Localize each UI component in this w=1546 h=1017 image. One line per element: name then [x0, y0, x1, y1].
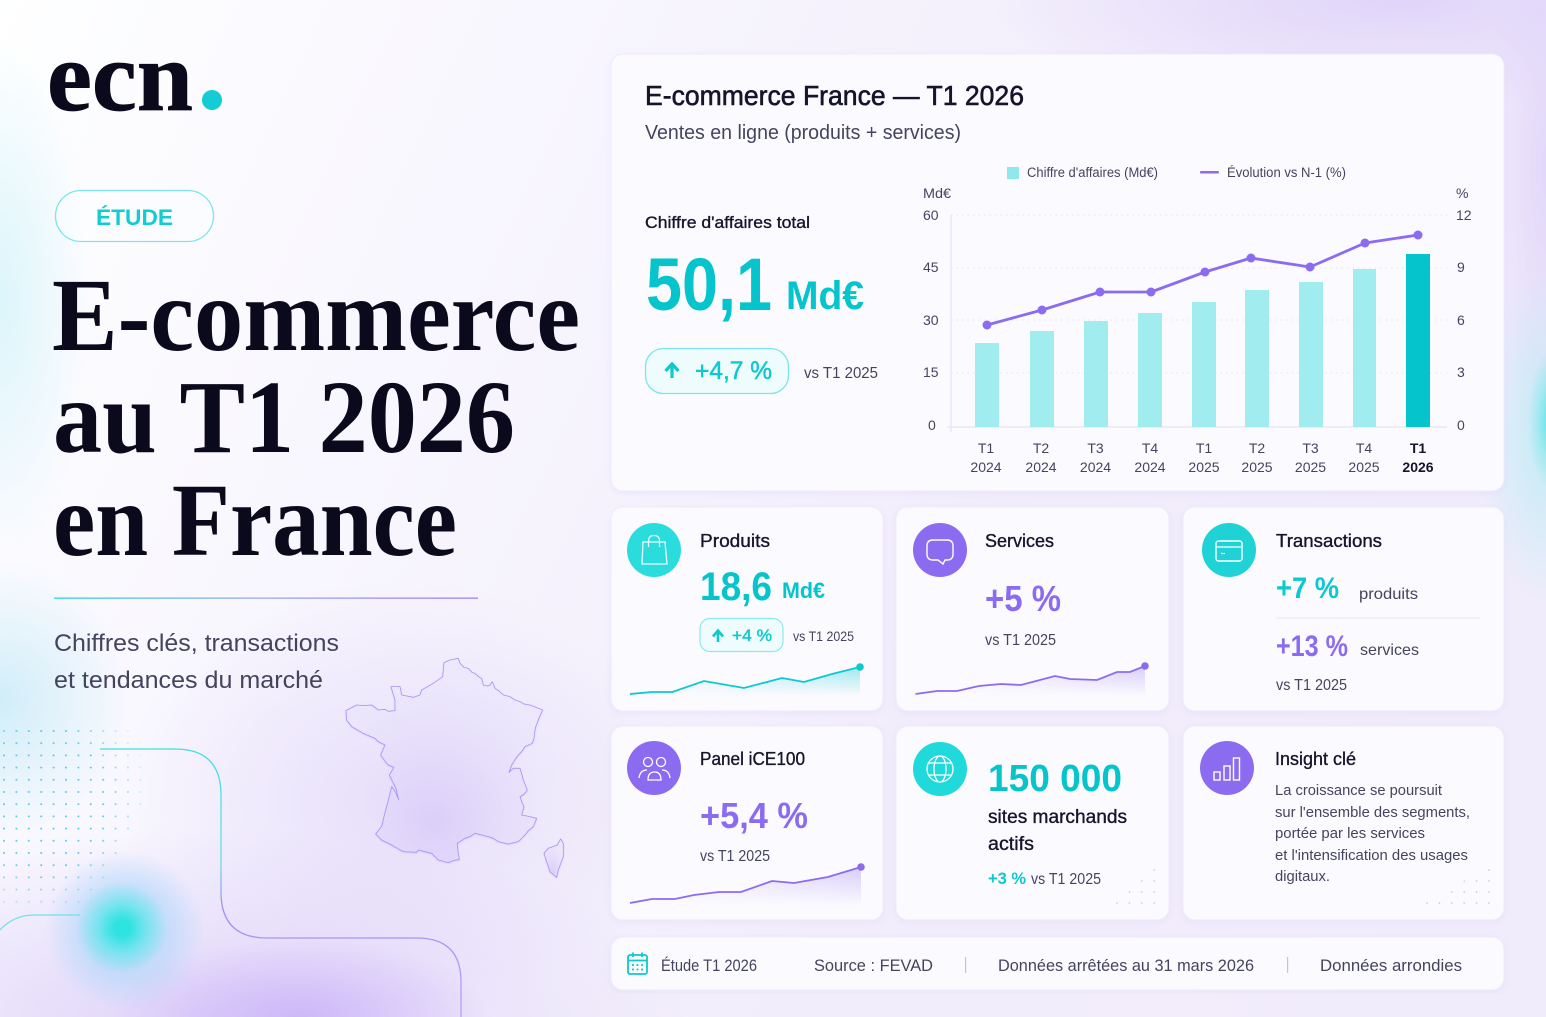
chart: revenue bars and growth line: 0 [928, 417, 936, 433]
total label: Chiffre d'affaires total [645, 213, 810, 232]
footer text [661, 956, 1462, 975]
chart: revenue bars and growth line: T3 [1087, 440, 1104, 456]
chart: revenue bars and growth line: 2026 [1402, 459, 1434, 475]
chart: revenue bars and growth line: T3 [1302, 440, 1319, 456]
insight text: La croissance se poursuit [1275, 782, 1443, 799]
title divider [54, 598, 478, 599]
footer text: Données arrêtées au 31 mars 2026 [998, 957, 1254, 975]
title: au T1 2026 [53, 360, 515, 475]
row divider [1276, 618, 1480, 619]
chart: revenue bars and growth line: 2025 [1348, 459, 1380, 475]
chart legend [1007, 165, 1346, 180]
badge: étude [56, 190, 214, 242]
chart: revenue bars and growth line: % [1456, 185, 1468, 201]
decorative curved line [0, 749, 461, 1017]
insight text: portée par les services [1275, 825, 1425, 842]
icon: globe [913, 742, 967, 796]
chart: revenue bars and growth line: 0 [1457, 417, 1465, 433]
card heading: Insight clé [1275, 749, 1356, 769]
value: produits: +7 % [1276, 572, 1339, 605]
card: produits [611, 507, 883, 711]
comparison label: vs T1 2025 [793, 628, 854, 644]
sparkline [630, 863, 865, 905]
chart: revenue bars and growth line: T2 [1249, 440, 1265, 456]
subtitle: et tendances du marché [54, 667, 323, 694]
chart: revenue bars and growth line: 2024 [1025, 459, 1057, 475]
chart: revenue bars and growth line: T1 [978, 440, 994, 456]
card heading: Produits [700, 531, 770, 551]
chart: revenue bars and growth line: T4 [1142, 440, 1158, 456]
chart: revenue bars and growth line: 2024 [1080, 459, 1111, 475]
chart: revenue bars and growth line: 15 [923, 364, 939, 380]
value: services [1276, 630, 1419, 663]
chart: revenue bars and growth line: Md€ [923, 185, 951, 201]
label [988, 807, 1127, 855]
chart: revenue bars and growth line: 2025 [1241, 459, 1273, 475]
title [52, 258, 580, 578]
icon: shopping bag [627, 523, 681, 577]
total value: 50,1 [646, 243, 772, 326]
panel: main e-commerce chart [611, 54, 1504, 990]
title: E-commerce [52, 258, 580, 373]
footer text: Étude T1 2026 [661, 956, 757, 975]
comparison label: vs T1 2025 [804, 365, 878, 382]
chart legend: Évolution vs N-1 (%) [1227, 165, 1346, 180]
panel subtitle: Ventes en ligne (produits + services) [645, 122, 961, 144]
comparison label: vs T1 2025 [1276, 677, 1347, 694]
value: produits [1276, 572, 1418, 605]
background dot grid [3, 730, 142, 903]
growth: vs T1 2025 [1031, 871, 1101, 888]
value: services: +13 % [1276, 630, 1348, 663]
chart: revenue bars and growth line [923, 185, 1472, 475]
value: produits: produits [1359, 586, 1418, 603]
logo: ecn: ecn [47, 21, 193, 132]
chart: revenue bars and growth line: T2 [1033, 440, 1049, 456]
card heading: Transactions [1276, 531, 1382, 551]
value: 18,6 [700, 565, 772, 609]
card: services [896, 507, 1169, 711]
chart: revenue bars and growth line: 2024 [970, 459, 1002, 475]
growth badge: +4,7 % [695, 357, 772, 385]
footer bar [611, 937, 1504, 990]
chart: revenue bars and growth line: 2025 [1295, 459, 1326, 475]
total value [646, 243, 864, 326]
chart: revenue bars and growth line: 3 [1457, 364, 1465, 380]
comparison label: vs T1 2025 [700, 848, 770, 865]
icon: credit card [1202, 523, 1256, 577]
total value: Md€ [786, 274, 864, 318]
chart: revenue bars and growth line: T4 [1356, 440, 1372, 456]
card: insight clé [1183, 726, 1504, 920]
subtitle [54, 630, 339, 694]
growth badge [646, 348, 788, 394]
label: sites marchands [988, 807, 1127, 828]
icon: people [627, 741, 681, 795]
chart: revenue bars and growth line: 12 [1456, 207, 1472, 223]
chart legend: Chiffre d'affaires (Md€) [1027, 165, 1158, 180]
insight text: et l'intensification des usages [1275, 847, 1468, 864]
card heading: Panel iCE100 [700, 749, 805, 769]
growth badge: +4 % [732, 626, 772, 645]
card: transactions [1183, 507, 1504, 711]
chart: revenue bars and growth line: 45 [923, 259, 939, 275]
chart: revenue bars and growth line: 30 [923, 312, 939, 328]
footer text: Données arrondies [1320, 957, 1462, 975]
value: 150 000 [988, 758, 1122, 800]
title: en France [53, 463, 457, 578]
card: sites marchands [896, 726, 1169, 920]
insight text: digitaux. [1275, 868, 1330, 885]
value: +5,4 % [700, 795, 808, 836]
insight text [1275, 782, 1470, 885]
insight text: sur l'ensemble des segments, [1275, 804, 1470, 821]
chart: revenue bars and growth line: 2025 [1188, 459, 1220, 475]
chart: revenue bars and growth line: 6 [1457, 312, 1465, 328]
footer text: Source : FEVAD [814, 957, 933, 975]
icon: calendar [628, 952, 647, 974]
sparkline [916, 662, 1149, 696]
value: services: services [1360, 642, 1419, 659]
subtitle: Chiffres clés, transactions [54, 630, 339, 657]
panel title: E-commerce France — T1 2026 [645, 80, 1024, 111]
value: +5 % [985, 578, 1061, 619]
growth [988, 869, 1101, 888]
label: actifs [988, 834, 1034, 855]
map of France [346, 658, 563, 877]
icon: bar chart [1200, 741, 1254, 795]
badge: étude: ÉTUDE [96, 205, 173, 230]
card: panel iCE100 [611, 726, 883, 920]
icon: speech bubble [913, 523, 967, 577]
chart: revenue bars and growth line: T1 [1196, 440, 1212, 456]
card heading: Services [985, 531, 1054, 551]
growth: +3 % [988, 869, 1026, 888]
value [700, 565, 825, 609]
value: Md€ [782, 578, 825, 603]
growth badge [700, 618, 783, 652]
chart: revenue bars and growth line: 9 [1457, 259, 1465, 275]
chart: revenue bars and growth line: 2024 [1134, 459, 1166, 475]
chart: revenue bars and growth line: T1 [1410, 440, 1426, 456]
comparison label: vs T1 2025 [985, 632, 1056, 649]
chart: revenue bars and growth line: 60 [923, 207, 939, 223]
sparkline [630, 663, 864, 696]
